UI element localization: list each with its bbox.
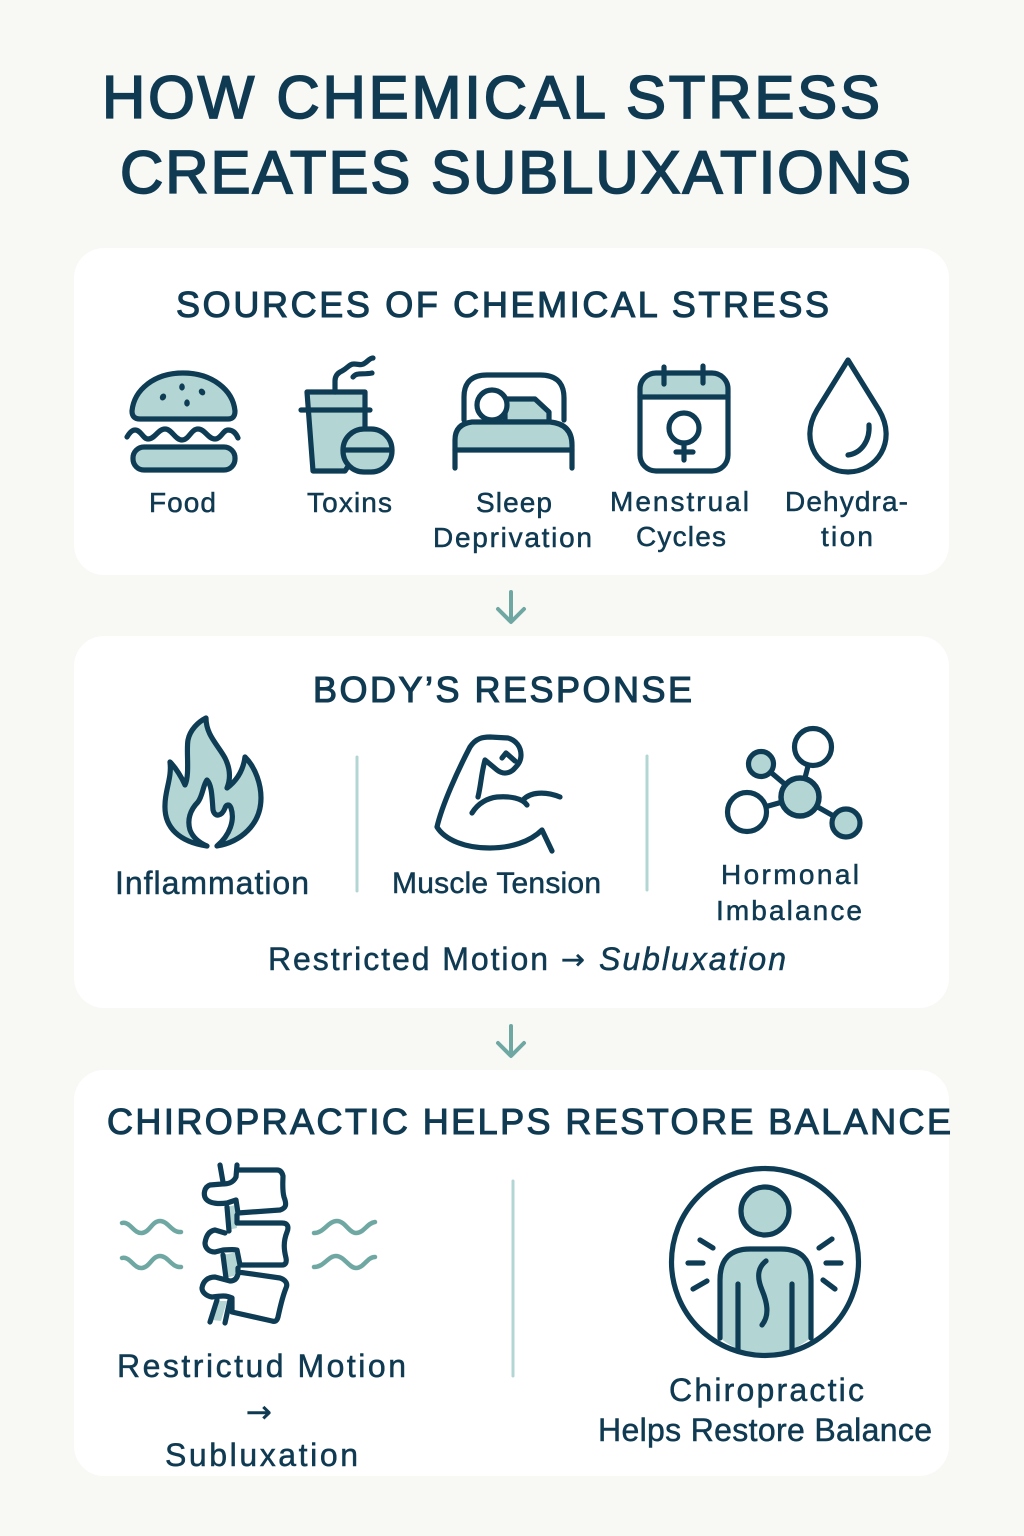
icon: bed [455,375,572,468]
label: chiropractic helps restore balance: Helps Restore Balance [598,1412,932,1448]
label: sleep deprivation: Sleep [476,487,552,518]
label: restricted motion to subluxation: Subluxation [165,1437,358,1473]
icon: burger [127,373,238,470]
heading: sources of chemical stress: SOURCES OF CHEMICAL STRESS [176,284,829,325]
label: dehydration: Dehydra- [785,486,908,517]
label: chiropractic helps restore balance [598,1372,932,1448]
label: restricted motion to subluxation [117,1348,406,1473]
label: sleep deprivation [433,487,592,553]
label: restricted motion to subluxation: Restrictud Motion [117,1348,406,1384]
label: sleep deprivation: Deprivation [433,522,592,553]
icon: molecule [728,728,860,837]
label: hormonal imbalance: Imbalance [716,895,862,926]
label: toxins: Toxins [307,487,392,518]
arrow: sources to response [498,592,524,622]
label: hormonal imbalance [716,859,862,926]
label: muscle tension: Muscle Tension [392,867,601,900]
icon: right tension waves [314,1221,375,1268]
panel: chiropractic helps restore balance [74,1070,951,1476]
icon: toxins cup and pill [301,358,392,472]
text: restricted motion to subluxation: → [561,943,585,976]
label: menstrual cycles: Menstrual [610,486,749,517]
label: dehydration: tion [821,521,873,552]
label: food: Food [149,487,216,518]
title: CREATES SUBLUXATIONS [120,139,911,206]
text: restricted motion to subluxation: Subluxation [599,941,786,977]
label: menstrual cycles: Cycles [636,521,726,552]
label: restricted motion to subluxation: → [246,1395,272,1430]
icon: person in circle [672,1168,858,1356]
icon: flame [165,718,261,846]
icon: water drop [810,360,886,472]
text: restricted motion to subluxation: Restricted Motion [268,941,548,977]
title: HOW CHEMICAL STRESS [102,64,880,131]
label: hormonal imbalance: Hormonal [721,859,859,890]
icon: left tension waves [122,1221,181,1268]
icon: flexed arm [437,737,560,851]
icon: calendar with female symbol [640,366,728,471]
text: restricted motion to subluxation [268,941,786,977]
panel: sources of chemical stress [74,248,949,575]
heading: chiropractic helps restore balance: CHIROPRACTIC HELPS RESTORE BALANCE [107,1101,951,1142]
label: inflammation: Inflammation [115,865,309,901]
heading: body's response: BODY’S RESPONSE [313,669,692,710]
arrow: response to chiropractic [498,1026,524,1056]
title [102,64,911,206]
icon: spine [202,1165,288,1323]
label: menstrual cycles [610,486,749,552]
label: dehydration [785,486,908,552]
label: chiropractic helps restore balance: Chiropractic [669,1372,864,1408]
panel: body's response [74,636,949,1008]
